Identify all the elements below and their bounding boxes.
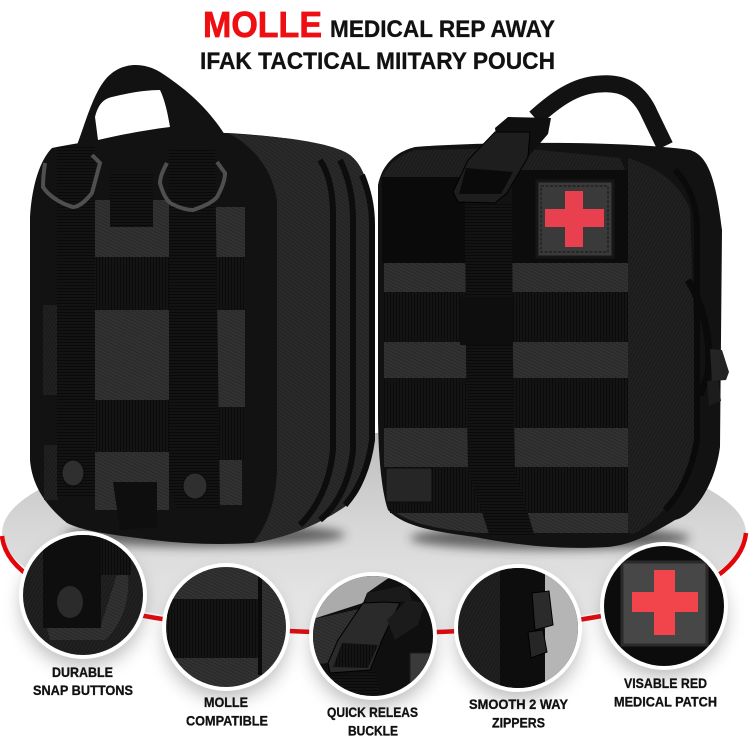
zipper pulls: [688, 280, 729, 406]
pouch body: [378, 143, 722, 548]
detail: red medical patch: [600, 540, 730, 670]
zipper side: [665, 170, 697, 510]
front twill panels: [43, 200, 245, 510]
pouch ground shadows: [65, 523, 690, 550]
right pouch: front view: [378, 84, 729, 548]
label: visable red medical patch: MEDICAL PATCH: [614, 694, 717, 710]
pouch body: [30, 133, 372, 544]
side panel: [230, 134, 372, 543]
snap buttons: [62, 460, 207, 499]
detail: snap buttons: [19, 530, 150, 660]
label: molle compatible: [186, 695, 268, 728]
top twill: [382, 148, 628, 177]
carry handle: [535, 84, 665, 146]
label: quick release buckle: BUCKLE: [348, 724, 398, 738]
title: MEDICAL REP AWAY: [330, 16, 555, 43]
label: smooth 2 way zippers: SMOOTH 2 WAY: [469, 697, 568, 712]
label: smooth 2 way zippers: ZIPPERS: [492, 716, 545, 730]
velcro panel: [382, 177, 465, 263]
carry handle: [77, 65, 225, 170]
side panel: [628, 158, 698, 534]
circle drop shadows: [21, 543, 726, 708]
side release buckle: [453, 117, 551, 203]
title: IFAK TACTICAL MIITARY POUCH: [200, 48, 555, 75]
title: MOLLE: [203, 4, 322, 45]
title: [200, 4, 555, 75]
label: molle compatible: MOLLE: [204, 695, 248, 710]
label: durable snap buttons: DURABLE: [52, 665, 113, 680]
label: molle compatible: COMPATIBLE: [186, 714, 268, 728]
label: smooth 2 way zippers: [469, 697, 568, 730]
label: durable snap buttons: [33, 665, 133, 698]
zipper seams: [300, 160, 372, 525]
twill bands: [384, 263, 628, 533]
patch backing: [512, 170, 628, 263]
label: quick release buckle: QUICK RELEAS: [327, 705, 418, 720]
detail: zippers: [454, 564, 585, 695]
MOLLE webbing bands: [95, 257, 245, 460]
label: visable red medical patch: VISABLE RED: [624, 676, 707, 691]
detail: MOLLE webbing: [160, 560, 290, 695]
left pouch: rear view: [30, 65, 372, 544]
grey display platform with red rim: [2, 433, 746, 633]
label: quick release buckle: [327, 705, 418, 738]
detail: quick release buckle: [309, 570, 440, 705]
strap keeper: [460, 297, 513, 345]
vertical straps: [57, 147, 220, 530]
brand logo patch: [386, 468, 432, 502]
label: visable red medical patch: [614, 676, 717, 710]
vertical strap: [465, 203, 535, 537]
label: durable snap buttons: SNAP BUTTONS: [33, 683, 133, 698]
D-rings: [43, 155, 225, 210]
red cross patch: [537, 181, 613, 257]
MOLLE webbing bands: [384, 292, 628, 513]
